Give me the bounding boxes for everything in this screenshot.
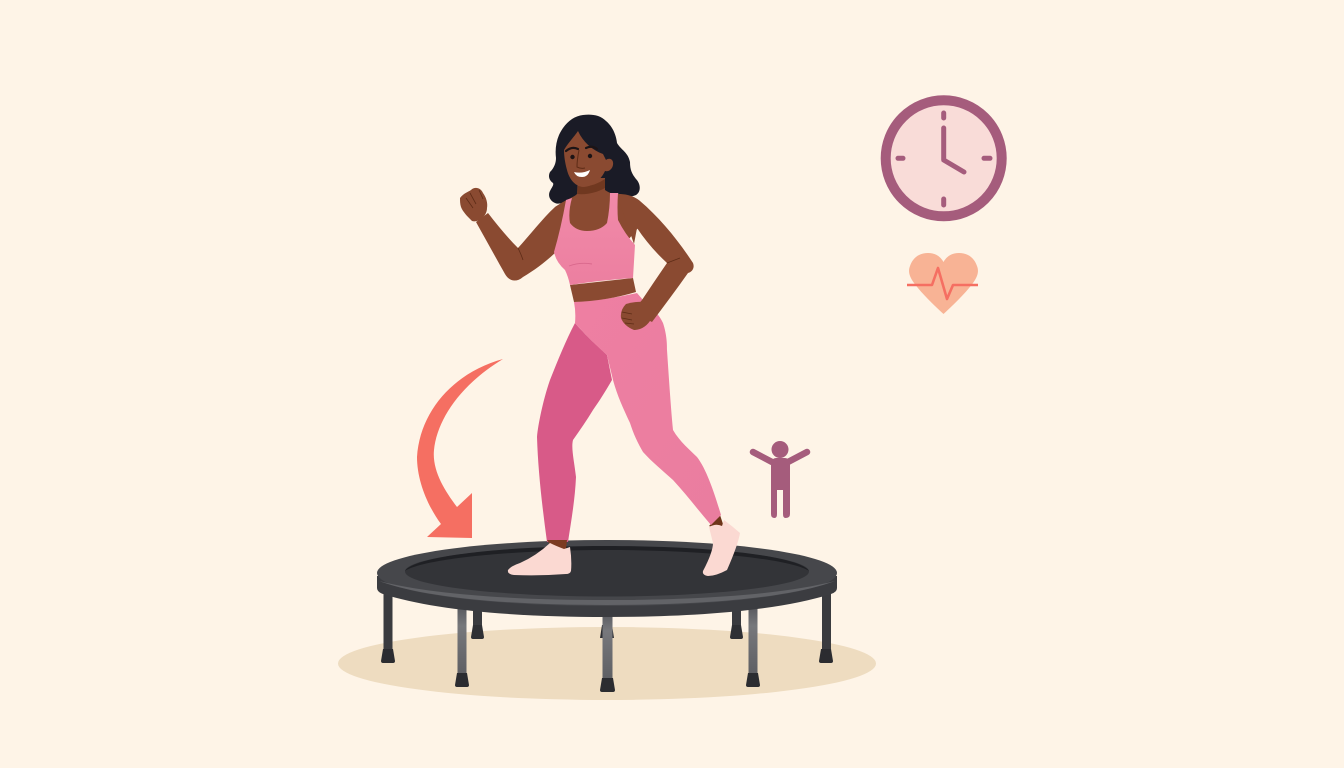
face details (566, 147, 597, 177)
clock icon (886, 100, 1002, 216)
midriff (570, 278, 636, 302)
front legs (381, 590, 833, 692)
floor shadow (338, 627, 876, 700)
jumping person icon (753, 441, 807, 518)
sports top (554, 193, 635, 285)
neck and shoulders (555, 178, 640, 262)
head (564, 131, 613, 187)
neck shadow (577, 179, 605, 194)
woman (460, 115, 740, 576)
heart rate icon (907, 253, 978, 314)
clock hands (944, 128, 964, 172)
clock ticks (898, 113, 990, 205)
back legs (471, 608, 743, 639)
frame top rim (377, 540, 837, 606)
left shoe (508, 543, 571, 575)
trampoline (377, 540, 837, 692)
pulse line (907, 268, 978, 299)
left arm (476, 202, 563, 281)
right arm (617, 195, 694, 322)
trampoline mat (405, 546, 809, 596)
hair back (549, 115, 640, 204)
right ankle (709, 515, 724, 527)
down arrow (417, 359, 503, 538)
left ankle (547, 540, 567, 550)
frame side (377, 576, 837, 617)
left fist (460, 188, 487, 221)
back leg (537, 323, 612, 542)
right hand (621, 302, 652, 330)
front leg and waist (574, 293, 721, 525)
right shoe (703, 520, 740, 576)
rim highlight (379, 581, 835, 605)
